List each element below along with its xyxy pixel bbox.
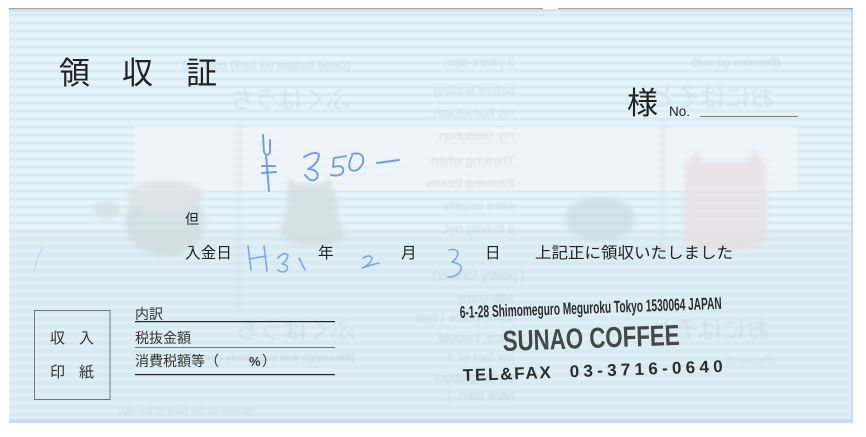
shop stamp	[459, 294, 723, 385]
ghost mirrored text: same place I had	[416, 310, 515, 325]
revenue stamp box: 印	[50, 364, 65, 381]
stamp shop name: SUNAO COFFEE	[502, 320, 680, 358]
title: 証	[186, 56, 217, 91]
title	[59, 56, 217, 91]
addressee suffix and number field: 様	[627, 86, 658, 121]
revenue stamp box: 紙	[79, 364, 94, 381]
ghost mirrored text: throwing beans	[426, 175, 515, 190]
stamp phone: TEL&FAX	[462, 363, 552, 385]
revenue stamp box: 収	[50, 330, 65, 347]
ghost mirrored text: once. I would	[438, 330, 515, 345]
faint pen mark	[34, 247, 43, 273]
received-for label: 但	[185, 211, 199, 227]
date row: 年	[318, 244, 334, 262]
ghost mirrored text: (Good fortune (or luck) come in)	[182, 60, 350, 72]
ghost mirrored text: (Demons)	[727, 355, 775, 367]
tax breakdown: 内訳	[135, 306, 163, 322]
revenue stamp box: 入	[79, 330, 94, 347]
ghost mirrored text: not last of. I	[448, 350, 515, 365]
ghost illustrations showing through the paper	[94, 120, 766, 315]
stamp phone: 03-3716-0640	[569, 357, 723, 381]
ghost mirrored text: a fishing net,	[441, 221, 515, 236]
tax breakdown: ）	[262, 353, 276, 369]
ghost mirrored text: 3 years ago,	[443, 54, 515, 69]
addressee suffix and number field	[627, 86, 798, 121]
addressee suffix and number field: No.	[669, 104, 690, 119]
title: 領	[59, 56, 90, 91]
tax breakdown: %	[249, 354, 261, 369]
ghost mirrored text: (printed on the back of the slip)	[118, 406, 255, 417]
ghost mirrored text: were usually	[442, 198, 516, 213]
ghost mirrored text: my hometown,	[430, 105, 515, 120]
date row	[185, 244, 733, 262]
ghost mirrored text	[118, 54, 780, 417]
revenue stamp box	[34, 310, 110, 400]
date row: 上記正に領収いたしました	[535, 244, 733, 262]
ghost mirrored text: (Blessings and happiness come)	[192, 352, 355, 364]
ghost mirrored text: おにはそと	[650, 317, 770, 344]
ghost mirrored text: ふくはうち	[235, 317, 355, 344]
tax breakdown: 税抜金額	[135, 330, 191, 346]
ghost mirrored text: back then. )	[447, 388, 515, 403]
ghost mirrored text: my Setsubun	[439, 128, 515, 143]
ghost mirrored text: ( poetry forever)	[433, 268, 525, 283]
date row: 月	[401, 245, 417, 262]
stamp phone	[462, 357, 723, 385]
date row: 日	[485, 245, 501, 262]
title: 収	[122, 56, 153, 91]
date row: 入金日	[185, 244, 232, 262]
ghost mirrored text: (Demons go out)	[692, 57, 780, 69]
panel: pale show-through band	[134, 127, 797, 191]
ghost mirrored text: ふくはうち	[230, 87, 350, 114]
ghost mirrored text: おにはそと	[650, 84, 775, 112]
tax breakdown: 消費税額等（	[135, 353, 219, 369]
handwritten date	[248, 246, 461, 277]
tax breakdown	[135, 306, 335, 375]
ghost mirrored text: thinking about	[434, 370, 515, 385]
ghost mirrored text: Thinking when	[431, 153, 515, 168]
ghost mirrored text: with some	[456, 290, 516, 305]
handwritten amount	[262, 135, 399, 191]
ghost mirrored text: before leaving	[433, 83, 515, 98]
